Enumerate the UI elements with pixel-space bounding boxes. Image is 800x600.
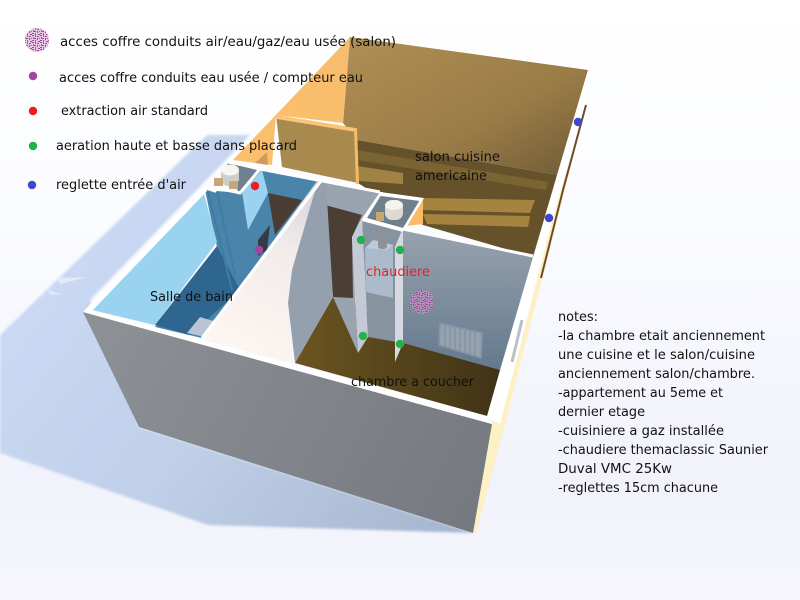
marker: aeration 2: [396, 246, 404, 254]
notes: Duval VMC 25Kw: [558, 461, 672, 477]
marker: aeration 3: [359, 332, 367, 340]
legend: conduits water: acces coffre conduits eau usée / compteur eau: [59, 70, 363, 86]
marker: aeration 4: [396, 340, 404, 348]
bedroom back wall: [403, 228, 533, 370]
label: chaudiere: chaudiere: [366, 264, 430, 280]
marker: air inlet 2: [545, 214, 553, 222]
gas closet upper: [362, 192, 424, 232]
notes: [558, 309, 768, 496]
bedroom floor: [295, 297, 500, 416]
label: chambre: chambre a coucher: [351, 374, 474, 390]
salon left orange wall: [233, 37, 350, 165]
bath fixture: [187, 317, 220, 337]
plan markers: [251, 118, 582, 348]
front wall top edge: [83, 310, 492, 424]
legend: red marker: [29, 107, 37, 115]
right wall top band: [487, 70, 588, 424]
label: salon: salon cuisine: [415, 149, 500, 165]
legend: extraction: extraction air standard: [61, 103, 208, 119]
wall tops white outlines: [202, 162, 533, 338]
bathroom opening: [258, 225, 270, 256]
bathroom floor: [155, 246, 240, 335]
legend: [25, 28, 396, 193]
right wall grey window: [512, 320, 522, 362]
notes: -chaudiere themaclassic Saunier: [558, 442, 768, 458]
marker: water conduit: [255, 246, 263, 254]
bathroom door: [268, 193, 302, 235]
front wall: [83, 312, 492, 533]
notes: notes:: [558, 309, 598, 325]
notes: -reglettes 15cm chacune: [558, 480, 718, 496]
top-left closet: [214, 163, 257, 193]
orange partition: [276, 115, 358, 183]
notes: -appartement au 5eme et: [558, 385, 723, 401]
bathroom base dark wall: [155, 170, 318, 338]
notes: une cuisine et le salon/cuisine: [558, 347, 755, 363]
marker: conduit access: [410, 290, 434, 314]
orange wall shaded wedge: [255, 152, 268, 165]
notes: -cuisiniere a gaz installée: [558, 423, 724, 439]
right wall window strip: [541, 105, 586, 278]
bathroom light wall: [92, 190, 217, 325]
salon back wall: [343, 37, 588, 175]
left wall top band: [83, 186, 207, 312]
marker: extraction: [251, 182, 259, 190]
salon floor: [357, 140, 557, 257]
ground shadow: [0, 135, 474, 533]
closet left fin: [352, 220, 368, 353]
right exterior wall: [473, 92, 590, 533]
notes: -la chambre etait anciennement: [558, 328, 765, 344]
room labels: [150, 149, 500, 390]
label: salle de bain: Salle de bain: [150, 289, 233, 305]
legend: conduits salon: acces coffre conduits air/eau/gaz/eau usée (salon): [60, 34, 396, 50]
marker: air inlet 1: [574, 118, 582, 126]
notes: dernier etage: [558, 404, 645, 420]
bedroom door wall: [318, 180, 380, 353]
marker: aeration 1: [357, 236, 365, 244]
white partition shaded end: [288, 180, 333, 363]
door opening: [325, 205, 362, 298]
closet right fin: [395, 228, 403, 362]
legend: blue marker: [28, 181, 36, 189]
legend: large speckled marker: [25, 28, 49, 52]
legend: green marker: [29, 142, 37, 150]
bathroom column lines: [208, 192, 235, 290]
boiler: [365, 234, 393, 298]
white partition wall: [202, 180, 318, 363]
legend: purple marker: [29, 72, 37, 80]
radiator: [439, 323, 482, 358]
shadow streaks: [48, 277, 88, 295]
legend: aeration: aeration haute et basse dans placard: [56, 138, 297, 154]
label: americaine: americaine: [415, 168, 487, 184]
notes: anciennement salon/chambre.: [558, 366, 755, 382]
apartment 3D model: [83, 37, 590, 533]
legend: reglette: reglette entrée d'air: [56, 177, 186, 193]
bathroom pillar: [242, 170, 268, 230]
closet back: [362, 220, 403, 343]
